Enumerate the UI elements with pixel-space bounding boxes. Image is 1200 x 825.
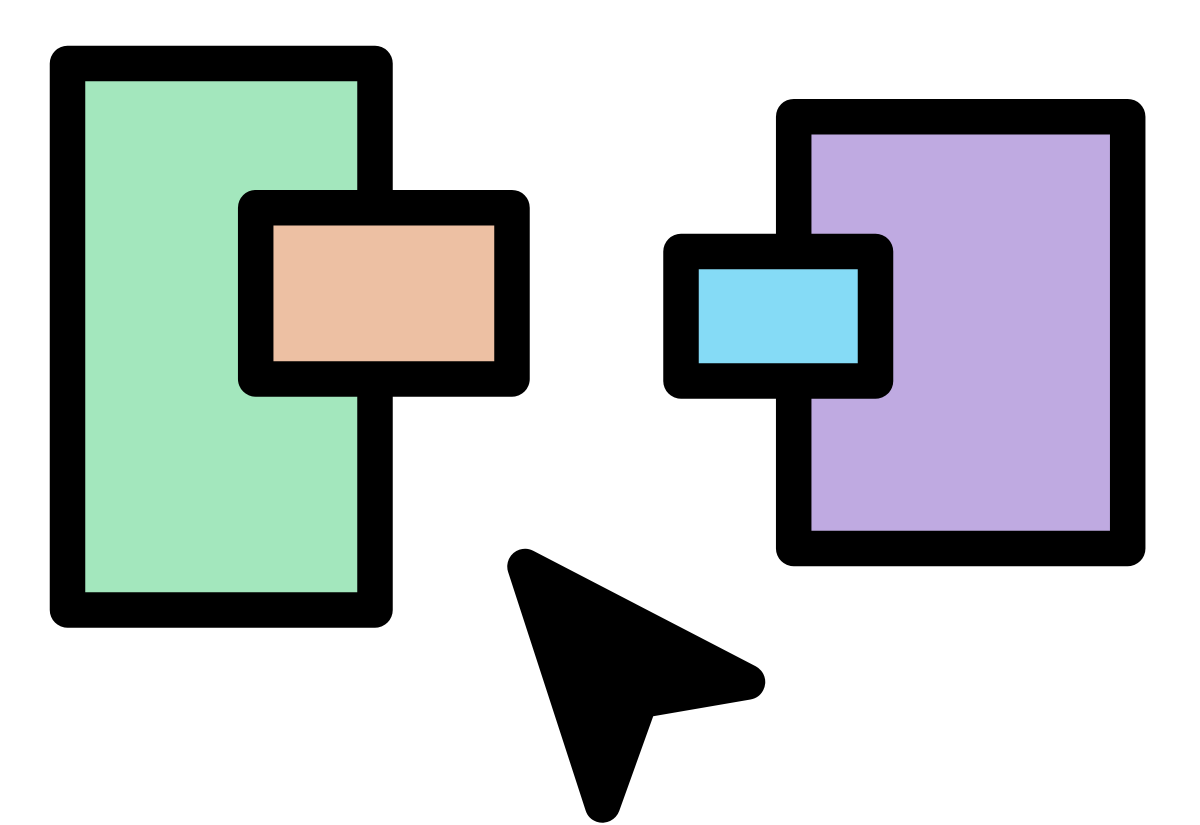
panel: purple rectangle: [794, 117, 1128, 548]
icon: cursor arrow: [525, 566, 748, 805]
panel: green tall rectangle: [68, 64, 375, 610]
panel: blue rectangle: [681, 252, 876, 381]
panel: orange rectangle: [256, 208, 512, 379]
